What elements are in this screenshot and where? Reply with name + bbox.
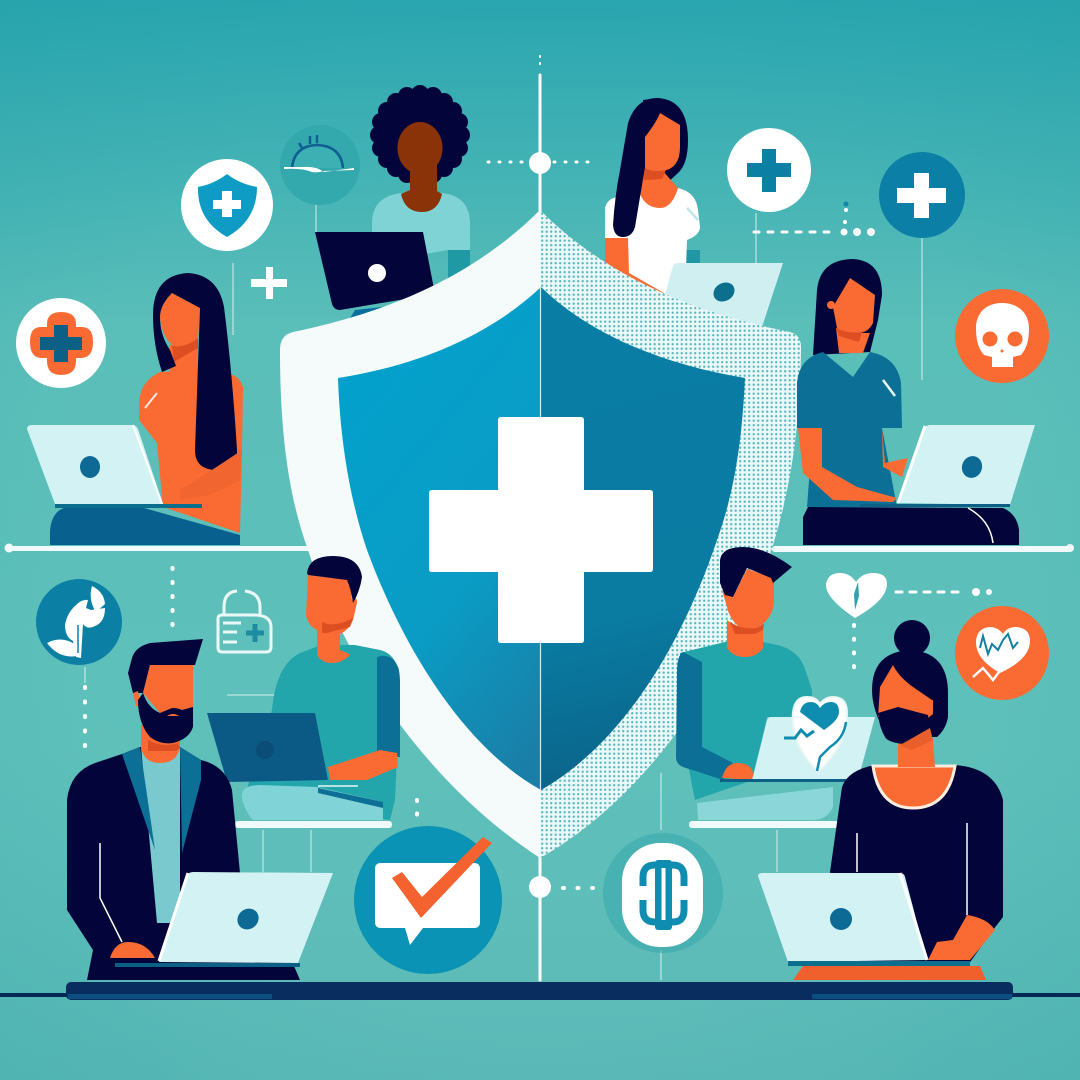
shield outer left [280, 210, 540, 858]
icon: speech bubble check [354, 826, 502, 974]
shield outer right [540, 210, 801, 858]
person: top centre-right woman in white [605, 98, 783, 327]
person: top centre-left with afro [315, 85, 470, 323]
shield [280, 210, 801, 858]
person: lower right man with laptop [676, 547, 875, 820]
person: lower left man with laptop [207, 556, 400, 820]
icon: blue circle with white plus [879, 152, 965, 238]
shield inner right [541, 287, 745, 790]
person: left woman in orange [27, 273, 243, 545]
icon: white badge with teal symbol [603, 833, 723, 953]
horizontal shelves [4, 544, 1074, 828]
connector lines [85, 56, 966, 980]
icon: white shield badge [181, 159, 273, 251]
icon: small plus [251, 267, 287, 299]
icon: white broken heart [826, 573, 887, 618]
person: foreground man with beard [67, 639, 333, 980]
icon: orange skull [955, 289, 1049, 383]
icon: heart stethoscope on laptop [784, 697, 847, 772]
person: right woman in blue [797, 259, 1035, 545]
icon: hand and dome [280, 125, 360, 205]
centre line [540, 287, 542, 790]
shield inner left [338, 287, 541, 790]
ground line [0, 982, 1080, 1000]
person: foreground woman in black with hair bun [758, 620, 1003, 980]
icon: padlock document [218, 591, 271, 652]
connector nodes [529, 152, 992, 898]
icon: white circle with orange cross [16, 298, 106, 388]
medical cross [429, 417, 653, 643]
icon: white circle with teal plus [727, 128, 811, 212]
icon: orange heart pulse [955, 606, 1049, 700]
icon: leaf circle [36, 579, 122, 665]
